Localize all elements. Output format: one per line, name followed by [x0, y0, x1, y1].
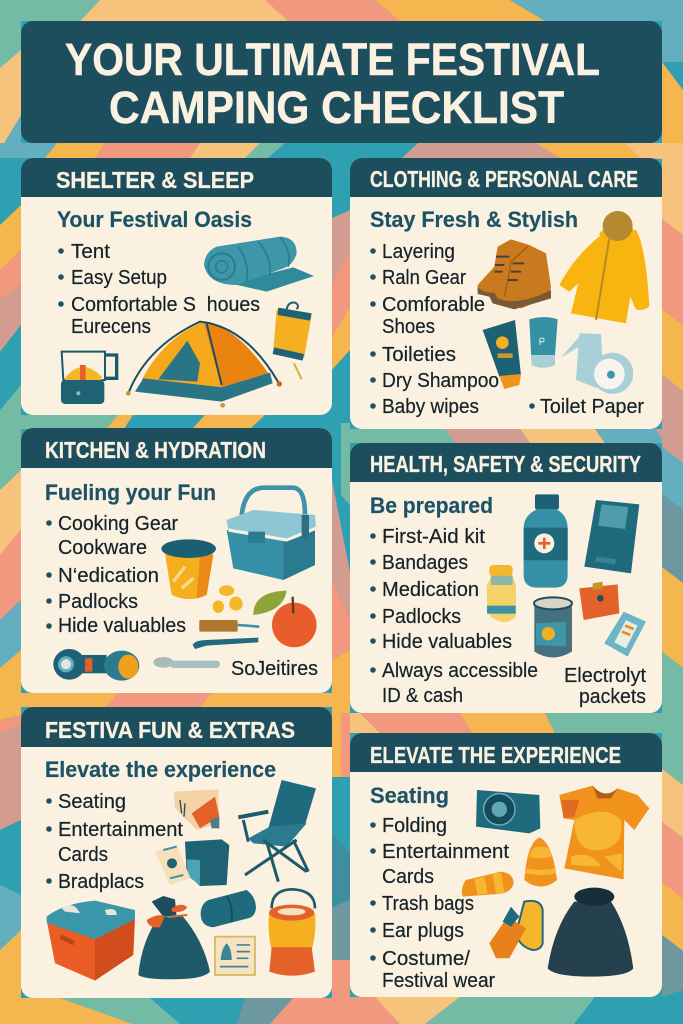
icon: hiking boots: [478, 239, 551, 309]
icon: sunscreen tube: [483, 320, 521, 389]
checklist: clothing items: Layering: [382, 241, 455, 263]
checklist: kitchen items: Padlocks: [58, 591, 138, 613]
checklist: shelter items: Easy Setup: [71, 267, 167, 289]
panel: clothing and personal care: Stay Fresh & Stylish: [370, 207, 578, 232]
title banner: YOUR ULTIMATE FESTIVAL: [65, 34, 600, 85]
icon: document tablet: [584, 500, 639, 573]
label: electrolyte packets: Electrolyt: [564, 665, 646, 687]
checklist: experience items: Cards: [382, 866, 434, 888]
checklist: festival items: Entertainment: [58, 819, 183, 841]
icon: pass and pouch: [155, 839, 229, 886]
icon: teal cup: [529, 317, 558, 367]
panel: shelter and sleep: [21, 158, 332, 415]
icon: electrolyte packet: [604, 612, 646, 657]
title banner: [21, 21, 662, 143]
panel: clothing and personal care: [350, 158, 662, 429]
icon: sleeping mat roll: [204, 237, 314, 292]
checklist: festival items: Cards: [58, 844, 108, 866]
panel: health, safety and security: Be prepared: [370, 493, 493, 518]
icon: orange storage bin: [47, 901, 135, 981]
icon: rolled blanket: [201, 890, 256, 927]
icon: lantern mug: [61, 352, 117, 404]
checklist: festival items: Bradplacs: [58, 871, 144, 893]
icon: tie-dye t-shirt: [559, 786, 649, 879]
panel: festival fun and extras: FESTIVA FUN & EXTRAS: [45, 717, 295, 743]
checklist: health items: Hide valuables: [382, 631, 512, 653]
label: electrolyte packets: packets: [579, 686, 646, 708]
checklist: experience items: Trash bags: [382, 893, 474, 915]
checklist: clothing items: Toilet Paper: [540, 396, 644, 418]
icon: first-aid bottle: [524, 494, 568, 588]
icon: ear plugs case: [489, 901, 543, 958]
checklist: shelter items: Comfortable S houes: [71, 294, 260, 316]
icon: binoculars: [53, 649, 139, 681]
checklist: health items: Padlocks: [382, 606, 461, 628]
checklist: clothing items: Raln Gear: [382, 267, 466, 289]
title banner: CAMPING CHECKLIST: [109, 82, 564, 133]
panel: health, safety and security: [350, 443, 662, 713]
icon: folding chair: [238, 780, 316, 882]
icon: playing cards: [174, 789, 219, 830]
icon: red wallet: [579, 582, 619, 620]
checklist: health items: First-Aid kit: [382, 526, 485, 548]
checklist: clothing items: Baby wipes: [382, 396, 479, 418]
panel: kitchen and hydration: Fueling your Fun: [45, 480, 216, 505]
checklist: health items: Medication: [382, 579, 479, 601]
panel: festival fun and extras: [21, 707, 332, 998]
checklist: kitchen items: Cooking Gear: [58, 513, 178, 535]
checklist: clothing items: Shoes: [382, 316, 435, 338]
checklist: clothing items: Toileties: [382, 344, 456, 366]
checklist: experience items: Ear plugs: [382, 920, 464, 942]
icon: yellow canister: [273, 303, 312, 379]
icon: foam ear plug: [462, 872, 514, 897]
icon: tin can: [534, 597, 572, 657]
panel: elevate the experience: [350, 733, 662, 997]
panel: kitchen and hydration: KITCHEN & HYDRATION: [45, 437, 266, 463]
icon: yellow food container: [161, 539, 216, 599]
checklist: shelter items: [58, 241, 260, 338]
icon: pill jar: [487, 565, 516, 622]
icon: teal cup: ᑭ: [538, 336, 545, 348]
checklist: clothing items: Dry Shampoo: [382, 370, 499, 392]
panel: elevate the experience: ELEVATE THE EXPERIENCE: [370, 742, 621, 768]
checklist: kitchen items: N‘edication: [58, 565, 159, 587]
panel: shelter and sleep: SHELTER & SLEEP: [56, 167, 254, 193]
icon: snack pieces, leaf and apple: [213, 585, 317, 647]
panel: elevate the experience: Seating: [370, 783, 449, 808]
icon: black trash bag: [548, 888, 633, 977]
icon: yellow raincoat: [559, 211, 649, 323]
checklist: kitchen items: Hide valuables: [58, 615, 186, 637]
icon: camera: [476, 790, 540, 833]
checklist: festival items: [46, 791, 183, 893]
checklist: health items: ID & cash: [382, 685, 463, 707]
checklist: shelter items: Eurecens: [71, 316, 151, 338]
icon: striped beanie: [524, 837, 557, 887]
checklist: experience items: Festival wear: [382, 970, 495, 992]
checklist: health items: Bandages: [382, 552, 468, 574]
icon: toilet paper roll: [561, 333, 633, 394]
icon: tied drawstring bag: [138, 896, 210, 979]
label: electrolyte packets: [564, 665, 646, 708]
icon: dome tent: [126, 322, 282, 408]
checklist: festival items: Seating: [58, 791, 126, 813]
checklist: experience items: [370, 815, 509, 992]
panel: kitchen and hydration: [21, 428, 332, 693]
icon: knife and spatula: [193, 620, 259, 649]
icon: camping lantern: [269, 889, 315, 976]
label: unreadable supplies note: SoJeitires: [231, 658, 318, 680]
checklist: health items: [370, 526, 538, 707]
checklist: kitchen items: [46, 513, 186, 637]
checklist: kitchen items: Cookware: [58, 537, 147, 559]
checklist: experience items: Entertainment: [382, 841, 509, 863]
panel: shelter and sleep: Your Festival Oasis: [57, 207, 252, 232]
icon: fork utensil: [153, 657, 220, 668]
checklist: shelter items: Tent: [71, 241, 110, 263]
checklist: experience items: Costume/: [382, 948, 470, 970]
icon: cooler box: [227, 488, 316, 580]
checklist: clothing items: Comforable: [382, 294, 485, 316]
checklist: health items: Always accessible: [382, 660, 538, 682]
checklist: experience items: Folding: [382, 815, 447, 837]
icon: ID card: [215, 937, 255, 975]
checklist: clothing items: [370, 241, 644, 418]
panel: festival fun and extras: Elevate the experience: [45, 757, 276, 782]
